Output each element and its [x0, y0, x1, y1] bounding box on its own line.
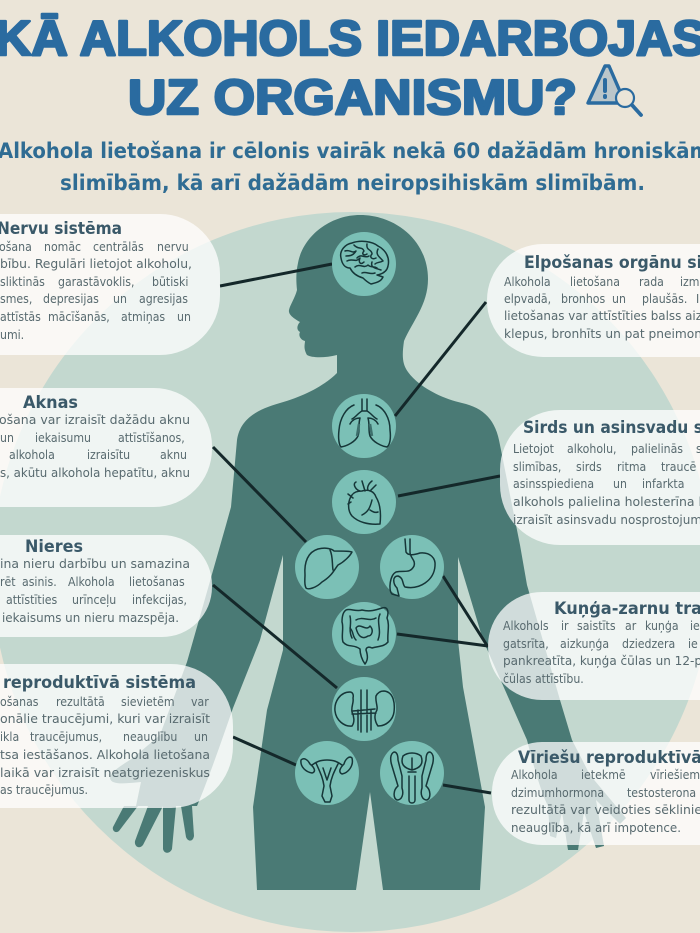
panel: female reproductive system: neauglību — [123, 730, 177, 744]
icon: intestines — [332, 602, 396, 666]
panel: kidneys: rēt — [0, 575, 16, 589]
panel: female reproductive system: rezultātā — [56, 695, 105, 709]
subtitle — [0, 139, 700, 196]
title: UZ ORGANISMU? — [128, 71, 577, 125]
icon: liver — [295, 535, 359, 599]
panel: female reproductive system: traucējumus, — [30, 730, 102, 744]
panel: respiratory organs: Alkohola — [504, 275, 551, 289]
panel: respiratory organs: lietošana — [570, 275, 620, 289]
panel: gastrointestinal tract: čūlas attīstību. — [503, 672, 584, 686]
panel: nervous system: mācīšanās, — [48, 310, 110, 324]
panel: liver: iekaisumu — [35, 431, 91, 445]
panel: heart and blood vessels: traucē — [661, 460, 696, 474]
panel: respiratory organs — [487, 244, 700, 357]
panel: respiratory organs: rada — [639, 275, 664, 289]
icon: brain — [332, 232, 396, 296]
panel: gastrointestinal tract: pankreatīta, kuņģa čūlas un 12-p — [503, 654, 700, 668]
panel: nervous system: sliktinās — [0, 275, 45, 289]
panel: kidneys: ina nieru darbību un samazina — [0, 557, 190, 571]
panel: liver: alkohola — [9, 448, 55, 462]
panel: nervous system: nervu — [157, 240, 189, 254]
panel: heart and blood vessels: infarkta — [642, 477, 684, 491]
panel: kidneys: iekaisums un nieru mazspēja. — [2, 611, 179, 625]
panel: male reproductive system: ietekmē — [581, 768, 626, 782]
panel: heart and blood vessels: sirds — [576, 460, 602, 474]
panel: respiratory organs: klepus, bronhīts un pat pneimon — [504, 327, 700, 341]
panel: heart and blood vessels: palielinās — [631, 442, 683, 456]
panel: liver: s, akūtu alkohola hepatītu, aknu — [0, 466, 190, 480]
panel: liver: aknu — [160, 448, 187, 462]
panel: kidneys — [0, 535, 212, 637]
panel: nervous system: atmiņas — [121, 310, 165, 324]
panel: respiratory organs: bronhos — [561, 292, 606, 306]
panel: nervous system: nomāc — [44, 240, 81, 254]
panel: heart and blood vessels: ritma — [617, 460, 646, 474]
panel: gastrointestinal tract: saistīts — [577, 619, 616, 633]
connector lines — [213, 264, 500, 793]
panel: gastrointestinal tract: Kuņģa-zarnu tra — [554, 599, 700, 618]
panel: kidneys: lietošanas — [129, 575, 185, 589]
icon: male reproductive organs — [380, 741, 444, 805]
panel: liver: izraisītu — [87, 448, 130, 462]
panel: heart and blood vessels: un — [613, 477, 627, 491]
panel: heart and blood vessels: slimības, — [513, 460, 561, 474]
panel: male reproductive system: neauglība, kā arī impotence. — [511, 821, 681, 835]
title: KĀ ALKOHOLS IEDARBOJAS — [0, 12, 700, 66]
panel: nervous system: Nervu sistēma — [0, 219, 122, 238]
panel: nervous system: un — [177, 310, 191, 324]
panel: kidneys: attīstīties — [6, 593, 58, 607]
panel: female reproductive system: var — [191, 695, 209, 709]
panel: male reproductive system: rezultātā var veidoties sēklinie — [511, 803, 700, 817]
panel: liver: ošana var izraisīt dažādu aknu — [0, 413, 190, 427]
panel: liver: un — [0, 431, 14, 445]
panel: nervous system: depresijas — [43, 292, 99, 306]
panel: female reproductive system — [0, 664, 233, 808]
human body silhouette — [110, 215, 626, 890]
title — [0, 12, 700, 125]
icon: warning triangle with magnifier — [588, 66, 641, 115]
icon: heart — [332, 470, 396, 534]
panel: heart and blood vessels: izraisīt asinsvadu nosprostojum — [513, 513, 700, 527]
panel: gastrointestinal tract: kuņģa — [645, 619, 679, 633]
panel: female reproductive system: onālie traucējumi, kuri var izraisīt — [0, 712, 211, 726]
panel: male reproductive system: Vīriešu reproduktīvā — [518, 748, 700, 767]
panel: female reproductive system: reproduktīvā sistēma — [3, 673, 196, 692]
panel: gastrointestinal tract: aizkuņģa — [560, 637, 609, 651]
panel: heart and blood vessels: Lietojot — [513, 442, 555, 456]
panel: male reproductive system: testosterona — [627, 786, 696, 800]
subtitle: Alkohola lietošana ir cēlonis vairāk nekā 60 dažādām hroniskām — [0, 139, 700, 164]
panel: heart and blood vessels: alkoholu, — [567, 442, 617, 456]
panel: gastrointestinal tract — [488, 592, 700, 700]
panel: female reproductive system: laikā var izraisīt neatgriezeniskus — [0, 766, 210, 780]
panel: respiratory organs: izm — [680, 275, 699, 289]
icon: lungs — [332, 394, 396, 458]
panel: gastrointestinal tract: dziedzera — [622, 637, 675, 651]
panel: respiratory organs: lietošanas var attīstīties balss aiz — [504, 309, 700, 323]
panel: gastrointestinal tract: ie — [690, 619, 700, 633]
panel: respiratory organs: I — [696, 292, 699, 306]
panel: nervous system: un — [113, 292, 127, 306]
panel: nervous system: attīstās — [0, 310, 41, 324]
panel: heart and blood vessels: alkohols palielina holesterīna l — [513, 495, 700, 509]
subtitle: slimībām, kā arī dažādām neiropsihiskām slimībām. — [60, 171, 645, 196]
panel: gastrointestinal tract: ie — [688, 637, 698, 651]
panel: male reproductive system: vīriešiem — [650, 768, 700, 782]
background circle — [0, 212, 700, 932]
panel: respiratory organs: elpvadā, — [504, 292, 551, 306]
panel: male reproductive system — [492, 742, 700, 845]
panel: kidneys: Alkohola — [68, 575, 115, 589]
panel: kidneys: Nieres — [25, 537, 83, 556]
panel: liver: attīstīšanos, — [118, 431, 185, 445]
panel: female reproductive system: tsa iestāšanos. Alkohola lietošana — [0, 748, 210, 762]
panel: nervous system: bību. Regulāri lietojot alkoholu, — [0, 257, 192, 271]
icon: kidneys — [332, 677, 396, 741]
panel: nervous system: garastāvoklis, — [58, 275, 134, 289]
panel: liver: Aknas — [23, 393, 78, 412]
panel: kidneys: urīnceļu — [72, 593, 116, 607]
panel: nervous system: smes, — [0, 292, 32, 306]
panel: nervous system — [0, 214, 220, 355]
icon: stomach — [380, 535, 444, 599]
panel: nervous system: būtiski — [152, 275, 188, 289]
panel: gastrointestinal tract: Alkohols — [503, 619, 549, 633]
panel: liver — [0, 388, 212, 507]
panel: gastrointestinal tract: gatsrīta, — [503, 637, 549, 651]
panel: gastrointestinal tract: ir — [561, 619, 569, 633]
panel: heart and blood vessels — [500, 410, 700, 545]
panel: male reproductive system: Alkohola — [511, 768, 558, 782]
panel: kidneys: infekcijas, — [132, 593, 187, 607]
panel: heart and blood vessels: Sirds un asinsvadu s — [523, 418, 700, 437]
panel: respiratory organs: Elpošanas orgānu si — [524, 253, 700, 272]
panel: male reproductive system: dzimumhormona — [511, 786, 604, 800]
panel: gastrointestinal tract: ar — [625, 619, 637, 633]
panel: female reproductive system: un — [194, 730, 208, 744]
panel: female reproductive system: sievietēm — [121, 695, 175, 709]
icon: female reproductive organs — [295, 741, 359, 805]
panel: heart and blood vessels: asinsspiediena — [513, 477, 594, 491]
panel: kidneys: asinis. — [22, 575, 57, 589]
panel: respiratory organs: plaušās. — [642, 292, 687, 306]
panel: female reproductive system: ošanas — [0, 695, 39, 709]
panel: female reproductive system: ikla — [0, 730, 19, 744]
panel: female reproductive system: as traucējumus. — [0, 783, 88, 797]
panel: nervous system: centrālās — [93, 240, 144, 254]
panel: nervous system: agresijas — [139, 292, 188, 306]
panel: respiratory organs: un — [612, 292, 626, 306]
panel: nervous system: umi. — [0, 328, 24, 342]
